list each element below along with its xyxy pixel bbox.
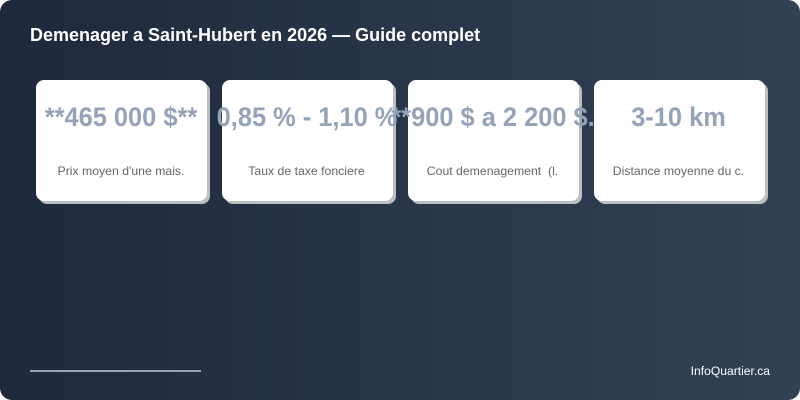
panel: property tax rate	[217, 80, 397, 204]
panel: property tax rate: 0,85 % - 1,10 %	[217, 102, 397, 132]
panel: moving cost	[391, 80, 595, 204]
panel: average house price: Prix moyen d'une mais.	[58, 164, 184, 178]
footer accent line	[30, 370, 201, 372]
panel: average house price: **465 000 $**	[45, 102, 198, 132]
panel: average distance: 3-10 km	[631, 102, 726, 132]
panel: property tax rate: Taux de taxe fonciere	[248, 164, 365, 178]
panel: moving cost: Cout demenagement (l.	[427, 164, 558, 178]
footer source: InfoQuartier.ca	[691, 364, 770, 378]
panel: moving cost: **900 $ a 2 200 $.	[391, 102, 595, 132]
panel: average distance	[594, 80, 768, 204]
panel: average distance: Distance moyenne du c.	[613, 164, 744, 178]
title: Demenager a Saint-Hubert en 2026 — Guide complet	[30, 25, 480, 45]
panel: average house price	[36, 80, 210, 204]
